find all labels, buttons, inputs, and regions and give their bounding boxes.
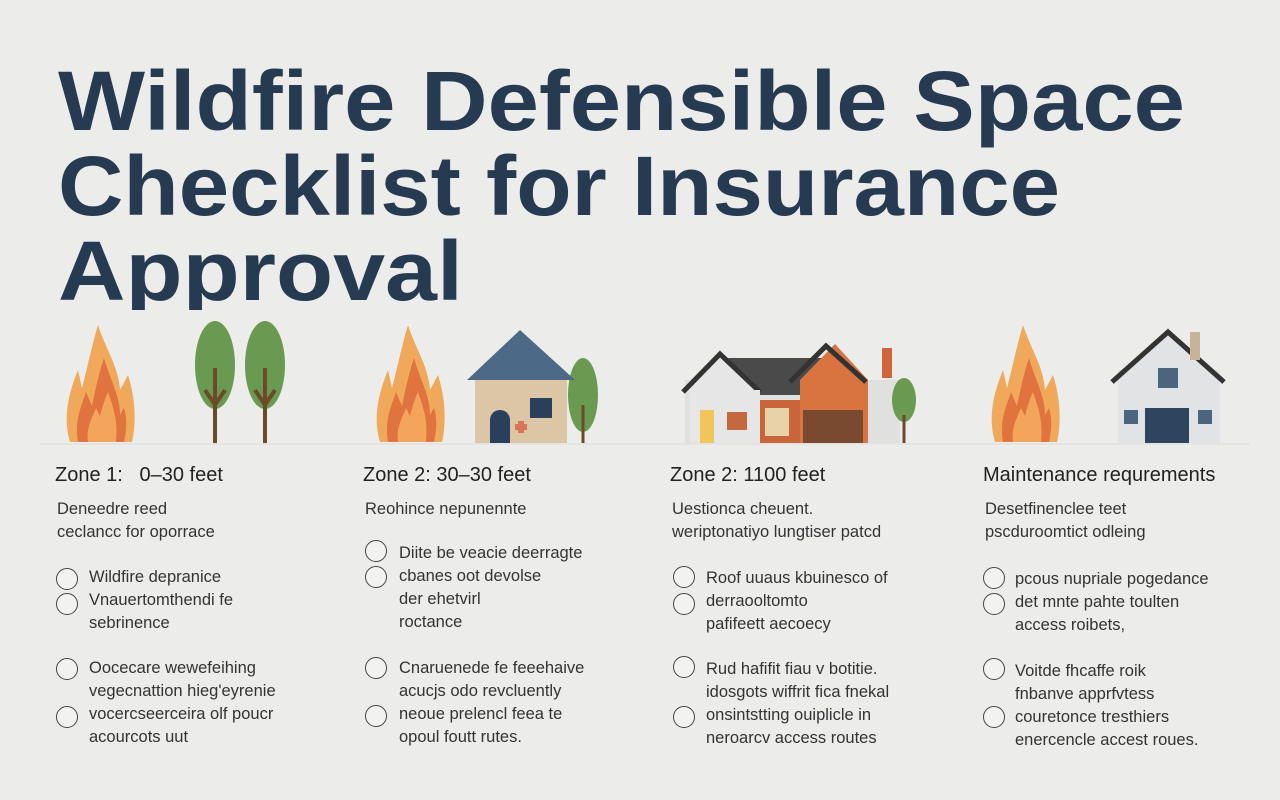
text zone3 intro: weriptonatiyo lungtiser patcd: [672, 523, 881, 541]
illustrations: [66, 321, 1226, 443]
text zone3 intro: [672, 500, 881, 541]
heading zone 3: Zone 2: 1100 feet: [670, 464, 825, 486]
panel: zone 3: [670, 464, 889, 747]
panel: zone 2: [363, 464, 584, 746]
checklist zone1: Wildfire depranice: [89, 568, 221, 586]
checklist zone3: neroarcv access routes: [706, 729, 877, 747]
text zone3 intro: Uestionca cheuent.: [672, 500, 813, 518]
checklist zone1: [56, 568, 276, 746]
checklist maintenance: couretonce tresthiers: [1015, 708, 1169, 726]
checklist zone2: acucjs odo revcluently: [399, 682, 561, 700]
title: Wildfire Defensible Space: [58, 54, 1185, 148]
heading zone 1: Zone 1: 0–30 feet: [55, 464, 223, 486]
checklist maintenance: pcous nupriale pogedance: [1015, 570, 1209, 588]
checklist zone2: opoul foutt rutes.: [399, 728, 522, 746]
text zone1 intro: [57, 500, 215, 541]
heading maintenance: Maintenance requrements: [983, 464, 1215, 486]
checklist zone3: pafifeett aecoecy: [706, 615, 831, 633]
text maintenance intro: pscduroomtict odleing: [985, 523, 1146, 541]
panel: maintenance: [983, 464, 1215, 749]
checklist zone2: Diite be veacie deerragte: [399, 544, 582, 562]
checklist zone1: Oocecare wewefeihing: [89, 659, 256, 677]
icon: garage house: [1112, 332, 1224, 444]
icon: large house: [683, 344, 916, 444]
checklist zone2: roctance: [399, 613, 462, 631]
checklist maintenance: Voitde fhcaffe roik: [1015, 662, 1146, 680]
text zone1 intro: ceclancc for oporrace: [57, 523, 215, 541]
checklist maintenance: fnbanve apprfvtess: [1015, 685, 1154, 703]
title: [58, 54, 1185, 310]
checklist zone2: Cnaruenede fe feeehaive: [399, 659, 584, 677]
checklist maintenance: enercencle accest roues.: [1015, 731, 1198, 749]
text zone1 intro: Deneedre reed: [57, 500, 167, 518]
text maintenance intro: Desetfinenclee teet: [985, 500, 1126, 518]
checklist zone1: vegecnattion hieg'eyrenie: [89, 682, 276, 700]
checklist zone3: [673, 566, 889, 747]
panel: zone 1: [55, 464, 276, 746]
checklist zone1: Vnauertomthendi fe: [89, 591, 233, 609]
icon: trees: [195, 321, 285, 444]
checklist maintenance: access roibets,: [1015, 616, 1125, 634]
checklist zone2: neoue prelencl feea te: [399, 705, 562, 723]
icon: flame zone1: [67, 325, 135, 442]
title: Checklist for Insurance: [58, 139, 1060, 233]
icon: small house: [467, 330, 598, 444]
icon: flame maintenance: [992, 325, 1060, 442]
icon: flame zone2: [377, 325, 445, 442]
text zone2 intro: Reohince nepunennte: [365, 500, 526, 518]
checklist zone1: sebrinence: [89, 614, 170, 632]
heading zone 2: Zone 2: 30–30 feet: [363, 464, 531, 486]
checklist zone3: derraooltomto: [706, 592, 808, 610]
checklist zone3: Rud hafifit fiau v botitie.: [706, 660, 878, 678]
checklist zone1: vocercseerceira olf poucr: [89, 705, 273, 723]
checklist zone3: Roof uuaus kbuinesco of: [706, 569, 888, 587]
checklist zone2: [365, 540, 584, 746]
checklist zone3: onsintstting ouiplicle in: [706, 706, 871, 724]
checklist zone2: der ehetvirl: [399, 590, 481, 608]
checklist maintenance: det mnte pahte toulten: [1015, 593, 1179, 611]
checklist zone3: idosgots wiffrit fica fnekal: [706, 683, 889, 701]
checklist maintenance: [983, 567, 1209, 749]
checklist zone1: acourcots uut: [89, 728, 188, 746]
checklist zone2: cbanes oot devolse: [399, 567, 541, 585]
text maintenance intro: [985, 500, 1146, 541]
